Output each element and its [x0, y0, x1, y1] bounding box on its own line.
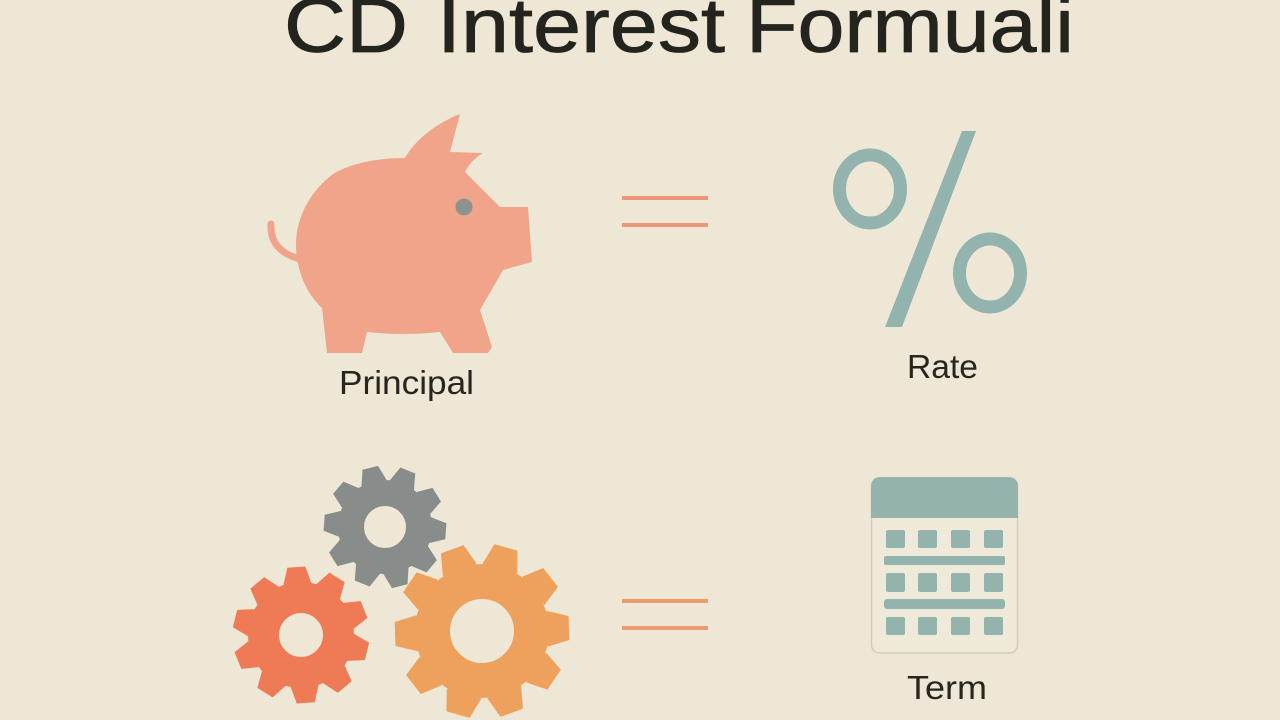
- icon: calendar: [871, 477, 1018, 653]
- title: [284, 0, 1074, 69]
- icon: piggy bank: [271, 114, 532, 353]
- label: Principal: Principal: [339, 364, 474, 401]
- equals sign: top: [622, 196, 708, 227]
- equals sign: bottom: [622, 599, 708, 630]
- label: Rate: Rate: [907, 348, 978, 385]
- label: Term: Term: [907, 669, 987, 706]
- icon: percent: [840, 131, 1020, 327]
- icon: gray gear: [323, 465, 447, 589]
- icon: red gear: [232, 566, 370, 704]
- icon: orange gear: [394, 542, 570, 720]
